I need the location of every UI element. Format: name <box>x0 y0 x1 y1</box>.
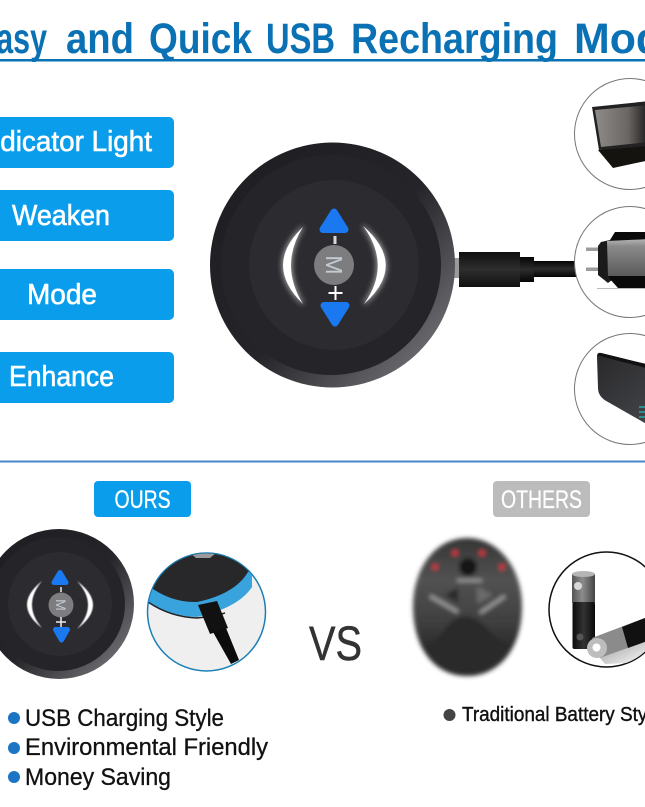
ours feature list <box>8 705 268 791</box>
badge: others: OTHERS <box>501 486 582 514</box>
feature: environmental: Environmental Friendly <box>25 734 268 761</box>
small mode button: M <box>53 599 69 611</box>
label: mode <box>0 269 174 320</box>
label: indicator light <box>0 117 174 168</box>
connection circle: power bank <box>574 334 645 444</box>
title: and <box>66 15 134 63</box>
badge: ours: OURS <box>114 486 170 514</box>
main device <box>210 142 455 388</box>
enhance button <box>324 306 346 323</box>
small enhance button <box>56 630 68 640</box>
indicator light left <box>283 227 303 304</box>
label: enhance: Enhance <box>9 361 114 393</box>
detail circle: USB port <box>146 540 268 671</box>
detail circle: batteries <box>549 552 645 667</box>
device inner disc <box>249 180 419 350</box>
small plus and minus <box>56 587 66 627</box>
USB cable and plug <box>454 252 576 287</box>
minus sign <box>334 236 336 244</box>
title: Quick <box>149 15 252 63</box>
connection circle: laptop <box>574 78 645 190</box>
feature: USB charging: USB Charging Style <box>25 705 224 732</box>
feature: money saving: Money Saving <box>25 764 171 791</box>
mode button: M <box>321 255 347 275</box>
device rim <box>210 142 455 388</box>
title <box>0 15 645 63</box>
plus sign <box>328 286 342 300</box>
section divider <box>0 460 645 462</box>
small weaken button <box>54 572 66 582</box>
title: USB <box>266 15 335 63</box>
weaken button <box>323 212 345 230</box>
label: weaken: Weaken <box>12 200 110 232</box>
blurred competitor device <box>413 538 522 680</box>
device face <box>221 155 441 375</box>
badge: ours <box>94 481 191 517</box>
mode button <box>314 245 354 285</box>
small mode button <box>48 592 74 618</box>
VS label: VS <box>309 618 362 671</box>
small device <box>0 529 134 679</box>
indicator light right <box>363 226 386 304</box>
title: Recharging <box>351 15 558 63</box>
connection circle: wall charger <box>574 206 645 318</box>
label: mode: Mode <box>27 279 97 311</box>
label: enhance <box>0 352 174 403</box>
title underline <box>0 59 645 62</box>
label: weaken <box>0 190 174 241</box>
small indicator lights <box>27 581 93 629</box>
badge: others <box>493 481 590 517</box>
